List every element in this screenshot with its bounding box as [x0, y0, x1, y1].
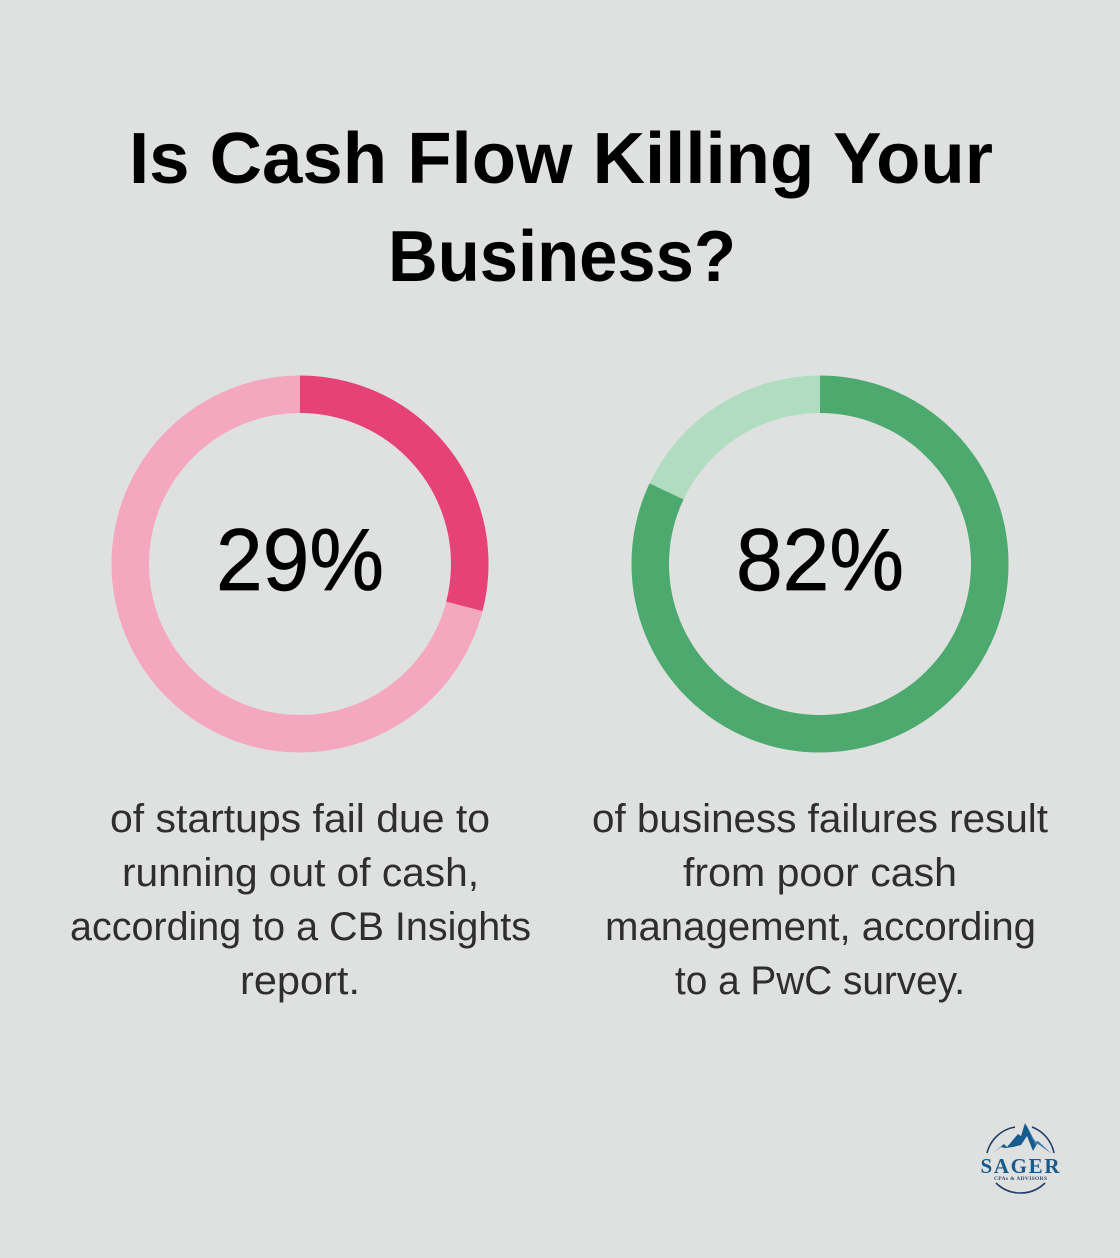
icon: logo ring — [987, 1127, 1054, 1193]
value: 29%: 29% — [216, 510, 384, 609]
title — [129, 119, 993, 297]
description: business failures: to a PwC survey. — [675, 959, 965, 1003]
panel: business failures stat — [592, 394, 1048, 1003]
icon: mountain — [993, 1123, 1037, 1153]
icon: mountain right ridge — [1026, 1124, 1052, 1154]
panel: startups stat — [70, 394, 531, 1003]
value: 82%: 82% — [736, 510, 904, 609]
donut chart: 82% — [650, 394, 990, 734]
description: business failures: from poor cash — [683, 851, 957, 895]
donut chart: 29% — [130, 394, 470, 734]
title: Business? — [388, 217, 736, 297]
description: startups: of startups fail due to — [110, 797, 490, 841]
wordmark: SAGER — [980, 1154, 1060, 1178]
description: business failures — [592, 797, 1048, 1003]
title: Is Cash Flow Killing Your — [129, 119, 993, 199]
logo: Sager CPAs & Advisors — [980, 1123, 1060, 1193]
description: business failures: management, according — [605, 905, 1036, 949]
tagline: CPAs & ADVISORS — [994, 1176, 1047, 1182]
description: startups: running out of cash, — [122, 851, 479, 895]
description: business failures: of business failures result — [592, 797, 1048, 841]
description: startups: according to a CB Insights — [70, 905, 531, 949]
description: startups: report. — [240, 959, 360, 1003]
description: startups — [70, 797, 531, 1003]
